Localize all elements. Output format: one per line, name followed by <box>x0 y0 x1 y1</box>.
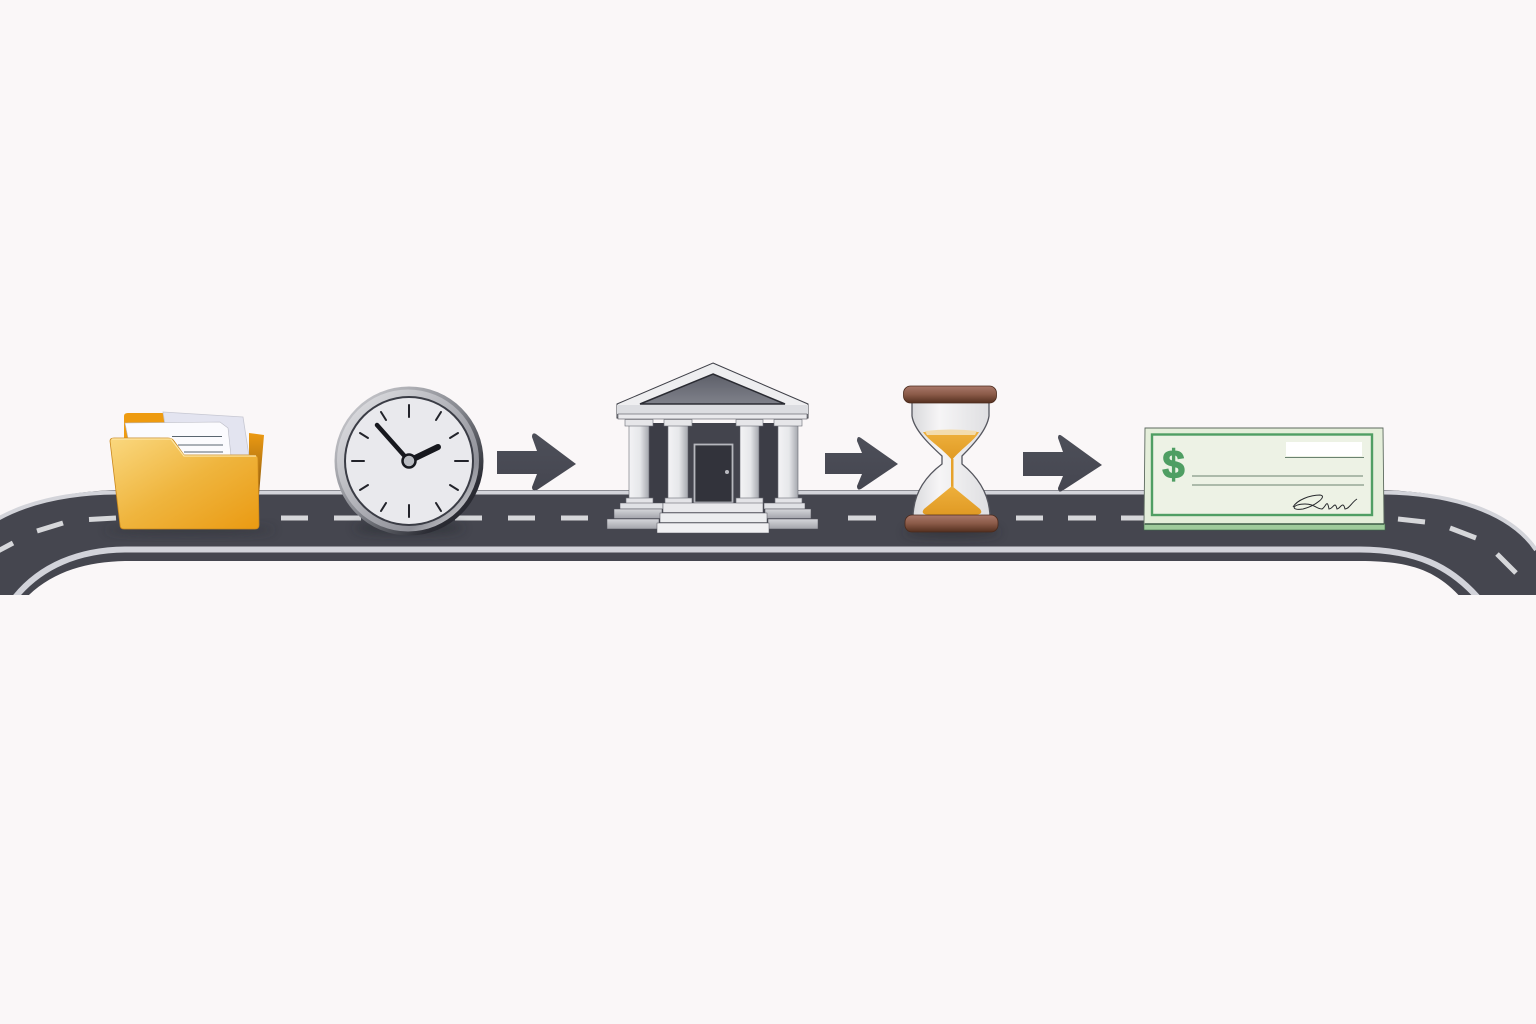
arrow 1 <box>497 433 576 491</box>
road <box>0 490 1536 600</box>
arrow 3 <box>1023 435 1102 492</box>
steps <box>607 503 818 533</box>
dollar sign: $ <box>1162 443 1185 487</box>
icon: hourglass <box>904 386 1000 537</box>
signature <box>1293 495 1357 509</box>
road top edge <box>0 492 1536 550</box>
arrow 2 <box>825 437 898 490</box>
clock hands <box>377 425 438 461</box>
road centre dashes <box>0 518 1516 573</box>
icon: bank building <box>607 363 818 533</box>
cheque lines <box>1192 458 1364 485</box>
clock tick marks <box>352 405 468 517</box>
wooden caps <box>904 386 996 403</box>
door <box>694 444 732 502</box>
infographic: process road <box>0 362 1536 595</box>
icon: clock <box>334 386 484 536</box>
glass <box>912 402 990 518</box>
icon: folder with papers <box>105 412 275 534</box>
sand <box>923 432 979 460</box>
road surface <box>0 490 1536 600</box>
columns <box>625 420 802 504</box>
road lower edge line <box>13 550 1480 600</box>
icon: cheque <box>1144 428 1385 530</box>
pediment <box>617 363 808 418</box>
